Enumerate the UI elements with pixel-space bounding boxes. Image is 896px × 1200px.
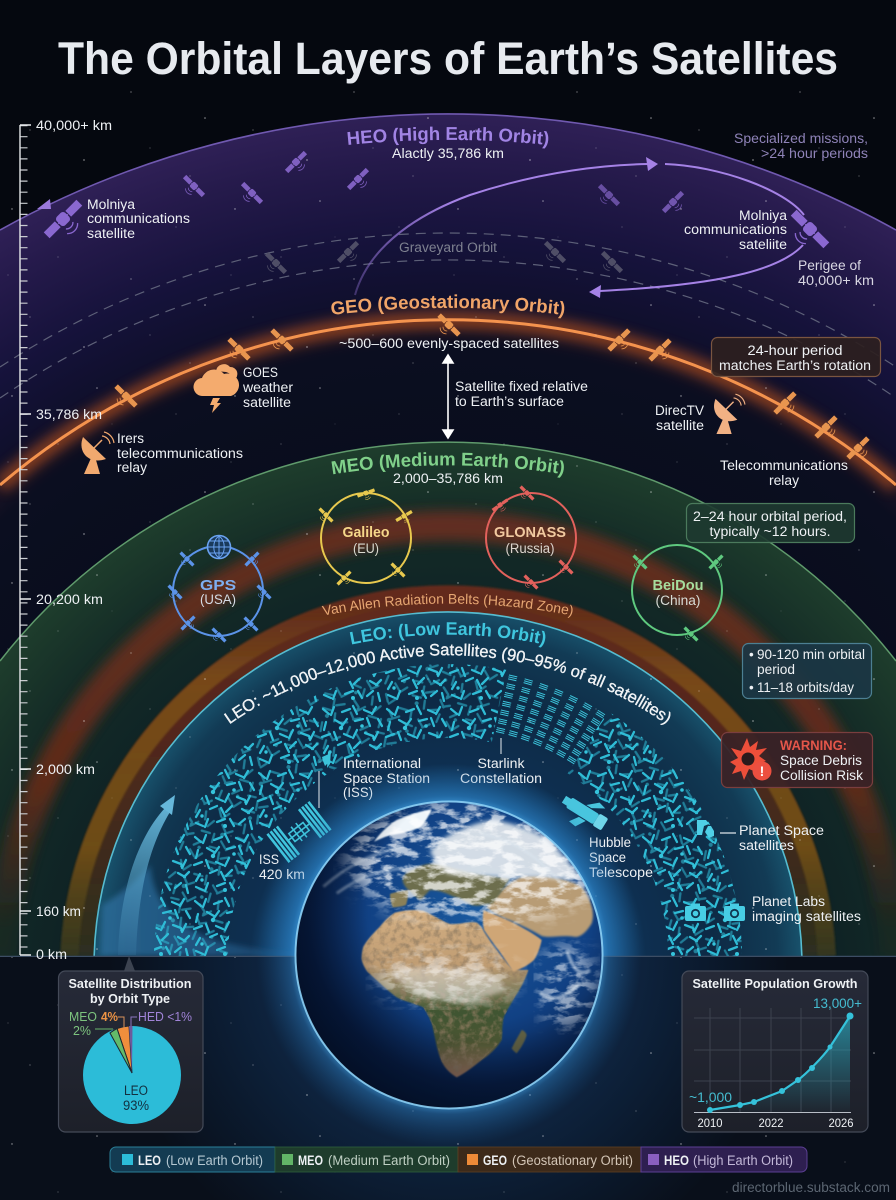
panel: orbital zones above the horizon [0,90,896,956]
panel title: by Orbit Type [90,992,170,1006]
GLONASS label [494,524,566,556]
Molniya satellite left [42,197,190,247]
night-side shading [295,801,603,1109]
ISS altitude label: ISS [259,852,279,867]
pie leader lines [95,1028,113,1030]
GEO orbit glow [0,320,896,485]
Galileo label: Galileo [342,524,390,541]
Planet Space leader line [720,832,736,834]
panel card [58,971,203,1132]
Hubble label: Hubble [589,835,631,850]
callout: space debris warning [722,732,872,788]
Galileo constellation [315,488,415,589]
MEO zone [0,442,896,956]
HEO boundary [0,114,896,230]
Irers label [117,431,243,475]
ISS label full: (ISS) [343,785,373,800]
pie: GEO slice [117,1026,132,1073]
Molniya label left: communications [87,211,190,226]
watermark: directorblue.substack.com [732,1180,890,1195]
ocean [295,801,603,1109]
Molniya label right: Molniya [739,208,787,223]
star field over zones [0,90,896,956]
Planet Labs label [752,894,861,924]
inner Van Allen belt [77,602,819,956]
graveyard satellites [260,240,624,279]
chart value labels: 13,000+ [813,995,862,1011]
perigee label: 40,000+ km [798,273,874,288]
ISS altitude label [259,852,305,882]
ruler major ticks [20,125,31,955]
perigee label [798,258,874,288]
chart card [682,971,868,1132]
callout: LEO orbital period: • [749,680,754,695]
icon: Hubble telescope [555,786,613,839]
legend item: LEO [110,1147,275,1172]
LEO heading: LEO: (Low Earth Orbit) [350,622,546,648]
north Atlantic cloud streaks [322,844,564,895]
arrow: HEO boundary [37,199,51,209]
MEO heading: MEO (Medium Earth Orbit) [332,452,564,478]
BeiDou label [652,577,704,608]
Earth atmosphere glow [257,763,641,1147]
pie labels [69,1010,192,1038]
ruler ticks [20,125,28,955]
telecommunications relay label [720,458,848,488]
east ocean cloud texture [537,943,597,1030]
pie labels: MEO [69,1010,97,1024]
outer Van Allen belt [1,526,895,956]
MEO altitude: 2,000–35,786 km [393,471,503,486]
icon: satellite dish [714,394,745,434]
graveyard orbit label: Graveyard Orbit [399,240,497,255]
HEO heading: HEO (High Earth Orbit) [347,126,548,148]
legend [110,1147,807,1172]
DirecTV label [655,403,704,433]
legend item: GEO: (Geostationary Orbit) [512,1153,633,1168]
Hubble label: Space [589,850,626,865]
GLONASS constellation [486,485,576,593]
altitude ruler [20,118,112,962]
chart area fill [710,1016,850,1112]
BeiDou ring [632,545,722,635]
Irers label: relay [117,460,147,475]
GLONASS label: GLONASS [494,524,566,541]
telecommunications relay label: Telecommunications [720,458,848,473]
Molniya label left: Molniya [87,197,135,212]
fixed satellite note: Satellite fixed relative [455,379,588,394]
Starlink label: Constellation [460,771,542,786]
panel title: Satellite Distribution [68,977,192,991]
DirecTV label: satellite [656,418,704,433]
Molniya orbit right arc [665,164,804,215]
HEO satellite icons [178,150,689,218]
GPS satellites [164,551,272,646]
GEO heading: GEO (Geostationary Orbit) [331,294,564,318]
LEO satellite count: LEO: ~11,000–12,000 Active Satellites (90–95% of all satellites) [224,644,670,726]
icon: satellite dish [81,432,114,474]
legend item: HEO: (High Earth Orbit) [693,1153,793,1168]
Indian Ocean clouds [540,950,590,998]
pie labels: 2% [73,1024,91,1038]
northern cloud mass [430,820,580,879]
warning text: Collision Risk [780,768,863,783]
ISS label full: International [343,756,421,771]
callout: LEO orbital period [742,644,872,698]
icon: storm cloud [194,364,239,413]
Irers label: telecommunications [117,446,243,461]
icon: camera left [685,904,706,921]
title: The Orbital Layers of Earth’s Satellites [58,33,838,84]
panel: GEO labels and satellites [81,294,882,520]
Africa mottling [362,911,528,1077]
icon: ISS space station [267,802,331,862]
Molniya orbit lower arc [600,245,803,291]
callout: 24-hour period: 24-hour period [748,343,842,358]
legend item: MEO [275,1147,458,1172]
Iberia land [390,890,408,907]
HEO mission note: >24 hour periods [761,146,868,161]
growth curve [710,1016,850,1110]
LEO launch sweep glow [98,865,271,956]
ruler labels [36,118,112,962]
callout: 24-hour period [712,338,880,376]
panel: satellite population growth chart [682,971,868,1132]
callout: MEO orbital period: typically ~12 hours. [710,524,830,539]
Planet Labs label: imaging satellites [752,909,861,924]
Planet Space label [739,823,824,853]
GLONASS label: (Russia) [506,541,554,556]
Molniya orbit upper arc [355,164,648,295]
BeiDou label: BeiDou [652,577,704,594]
warning text [780,738,863,783]
Arabia land [483,910,542,972]
callout: LEO orbital period: period [757,662,795,677]
LEO satellite swarm [191,701,705,958]
GEO satellite icons [109,313,875,465]
Earth limb highlight [296,802,602,1108]
arrow: launch direction [118,795,175,955]
BeiDou satellites [629,554,727,645]
ruler labels: 2,000 km [36,762,95,777]
legend item: MEO: MEO [298,1153,323,1168]
LEO slice label [123,1083,149,1113]
fixed satellite note [455,379,588,409]
Molniya label right: communications [684,222,787,237]
Galileo label: (EU) [353,541,379,556]
HEO altitude: Alactly 35,786 km [392,146,504,161]
HEO mission note: Specialized missions, [734,131,868,146]
callout: LEO orbital period: 11–18 orbits/day [757,680,854,695]
pie labels: 4% [101,1010,118,1024]
chart year labels [698,1116,854,1130]
icon: Molniya satellite [782,208,831,257]
MEO boundary [0,442,896,661]
Molniya satellite right [684,208,831,257]
Hubble label [589,835,653,880]
ruler labels: 20,200 km [36,592,103,607]
Africa land [362,910,528,1077]
ISS altitude label: 420 km [259,867,305,882]
Planet Space label: satellites [739,838,794,853]
BeiDou label: (China) [656,593,700,608]
Galileo ring [321,493,411,583]
GPS ring [173,546,263,636]
legend item: GEO: GEO [483,1153,507,1168]
southern cloud texture [373,947,520,1007]
horizon line [0,956,896,958]
GOES label: weather [242,380,294,395]
callout: LEO orbital period: • [749,647,754,662]
ruler labels: 40,000+ km [36,118,112,133]
GEO satellite count: ~500–600 evenly-spaced satellites [339,336,559,351]
chart title: Satellite Population Growth [692,977,858,991]
callout: MEO orbital period: 2–24 hour orbital period, [693,509,847,524]
callout: 24-hour period: matches Earth’s rotation [719,358,871,373]
GOES label [242,365,294,410]
Sahel cloud band [387,967,507,1003]
panel pointer [124,956,135,971]
Planet Labs label: Planet Labs [752,894,825,909]
icon: ISS module [322,751,331,768]
legend item: MEO: (Medium Earth Orbit) [328,1153,450,1168]
Molniya label left: satellite [87,226,135,241]
pie: LEO slice [83,1026,181,1124]
panel: satellite distribution pie chart [58,956,203,1132]
Planet Space label: Planet Space [739,823,824,838]
pie labels: HED <1% [138,1010,192,1024]
DirecTV label: DirecTV [655,403,704,418]
telecommunications relay label: relay [769,473,799,488]
GOES label: satellite [243,395,291,410]
legend item: LEO: (Low Earth Orbit) [166,1153,263,1168]
fixed satellite note: to Earth’s surface [455,394,564,409]
panel: HEO labels and satellites [37,126,874,298]
DirecTV satellite [655,394,745,434]
Galileo label [342,524,390,556]
Van Allen belts label: Van Allen Radiation Belts (Hazard Zone) [322,594,573,618]
GEO orbit line [0,320,896,485]
chart grid [694,1008,851,1112]
panel: MEO labels and constellations [168,452,856,643]
graveyard orbit dashed arcs [0,233,896,398]
icon: explosion warning [730,738,772,780]
inner belt gold band [69,594,827,956]
LEO slice label: LEO [124,1083,148,1098]
LEO zone [94,612,802,956]
ruler labels: 160 km [36,904,81,919]
Asia and Middle East land [487,876,593,937]
Europe land [403,864,510,906]
Molniya label left [87,197,190,241]
chart year labels: 2022 [758,1116,784,1130]
arrow: fixed position double arrow [443,355,453,438]
GPS constellation [164,536,272,646]
chart year labels: 2026 [828,1116,854,1130]
HEO mission note [734,131,868,161]
GLONASS satellites [491,485,574,593]
arrow: orbit direction apogee [646,157,658,171]
legend item: LEO: LEO [138,1153,161,1168]
Molniya label right: sateliite [739,237,787,252]
LEO boundary [94,612,802,956]
panel title [68,977,192,1006]
icon: explosion warning: ! [760,763,764,779]
Irers label: Irers [117,431,144,446]
GOES weather satellite [194,364,294,413]
HEO zone [0,114,896,483]
GPS label [200,577,236,607]
Starlink label: Starlink [478,756,525,771]
Galileo satellites [315,488,415,589]
Irers telecommunications relay [81,431,243,475]
ruler labels: 0 km [36,947,67,962]
ruler labels: 35,786 km [36,407,102,422]
icon: Earth globe [295,797,613,1109]
GPS label: GPS [200,577,236,594]
BeiDou constellation [629,545,727,645]
GOES label: GOES [243,365,278,380]
chart year labels: 2010 [698,1116,723,1130]
ISS label full [343,756,430,800]
warning text: WARNING: [780,738,847,753]
panel: LEO labels and swarm [118,622,874,956]
GPS label: (USA) [200,592,236,607]
GLONASS ring [486,493,576,583]
GEO zone [0,482,896,499]
pie: MEO slice [110,1028,132,1073]
chart value labels: ~1,000 [689,1089,732,1105]
northern cloud texture [347,797,613,923]
Starlink constellation grid [499,675,602,765]
ruler axis [19,125,21,955]
icon: Planet Space satellites [697,820,714,838]
icon: globe [208,536,230,558]
legend item: GEO [458,1147,641,1172]
Hubble label: Telescope [589,865,653,880]
ISS label full: Space Station [343,771,430,786]
lower star field [0,957,896,1200]
warning text: Space Debris [780,753,862,768]
chart value labels [689,995,862,1105]
growth data points [707,1012,854,1113]
Greenland ice [374,809,432,842]
pie: HEO slice [129,1026,132,1073]
legend item: HEO [641,1147,807,1172]
callout: LEO orbital period: 90-120 min orbital [757,647,865,662]
Madagascar [512,1030,527,1053]
legend item: HEO: HEO [664,1153,689,1168]
perigee label: Perigee of [798,258,861,273]
callout: MEO orbital period [686,504,854,542]
LEO slice label: 93% [123,1098,149,1113]
ISS leader line [318,771,320,808]
Starlink label [460,756,542,786]
arrow: orbit direction perigee [589,285,601,298]
chart axis [694,1112,851,1114]
icon: Molniya satellite [42,198,91,247]
Molniya label right [684,208,787,252]
icon: camera right [724,904,745,921]
Starlink leader line [500,738,502,754]
